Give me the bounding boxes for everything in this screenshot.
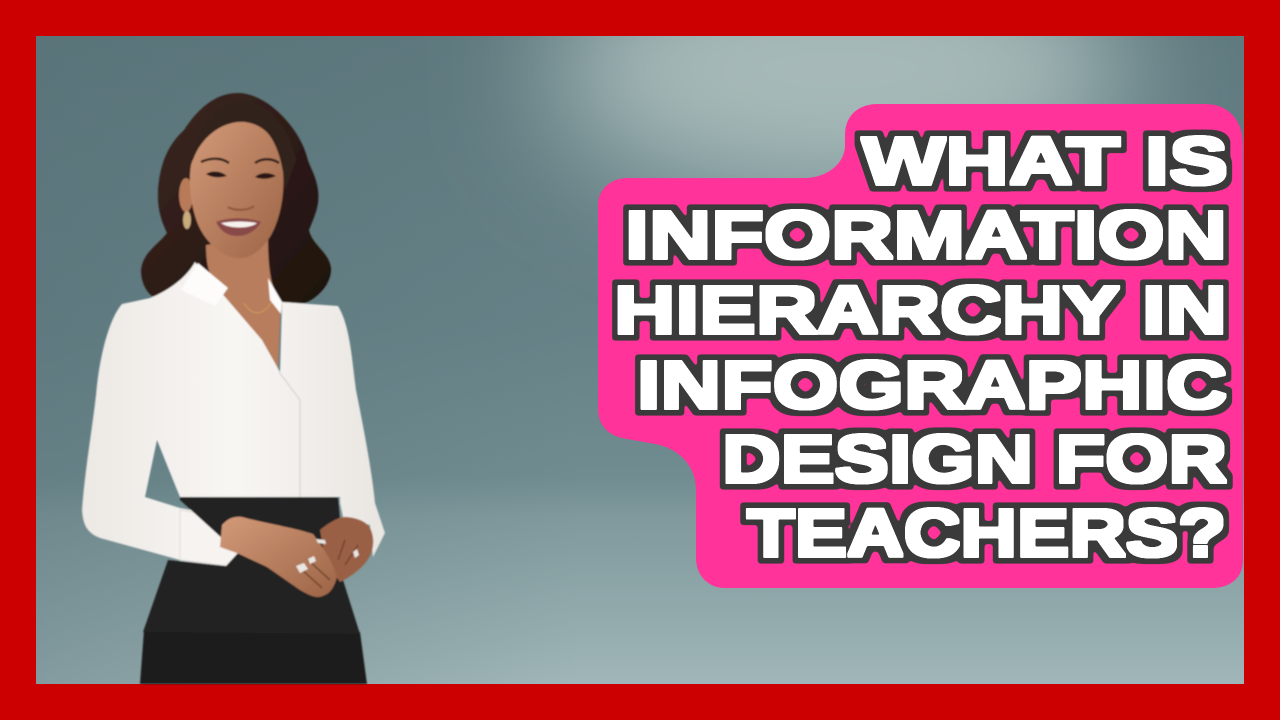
- eyebrows: [201, 159, 279, 163]
- person: woman in white blouse: [82, 93, 385, 684]
- title line 6: TEACHERS?: [747, 496, 1226, 571]
- ear: [179, 178, 193, 212]
- skirt lower: [140, 630, 367, 684]
- eyes: [206, 172, 276, 179]
- hand left: [220, 517, 337, 597]
- teeth: [221, 222, 257, 228]
- title line 4: INFOGRAPHIC: [637, 348, 1227, 423]
- hair back: [141, 93, 331, 307]
- sleeve cuff: [180, 510, 238, 566]
- title line 1: WHAT IS: [862, 124, 1228, 199]
- peplum and belt: [143, 497, 360, 634]
- rings: [296, 539, 359, 573]
- title line 5: DESIGN FOR: [722, 422, 1227, 497]
- hair front sweep: [193, 100, 296, 190]
- title text: [614, 124, 1228, 571]
- nose: [228, 206, 254, 210]
- face: [190, 122, 283, 258]
- finger lines: [300, 540, 358, 588]
- collar: [181, 263, 282, 314]
- earring: [183, 211, 191, 229]
- placket line: [279, 372, 300, 497]
- neck: [206, 235, 281, 372]
- necklace: [244, 303, 271, 313]
- blouse and sleeves: [82, 262, 385, 566]
- pink title panel: [598, 104, 1243, 588]
- title line 2: INFORMATION: [625, 198, 1227, 273]
- title line 3: HIERARCHY IN: [614, 273, 1227, 348]
- hand right: [320, 517, 373, 582]
- mouth: [216, 218, 261, 236]
